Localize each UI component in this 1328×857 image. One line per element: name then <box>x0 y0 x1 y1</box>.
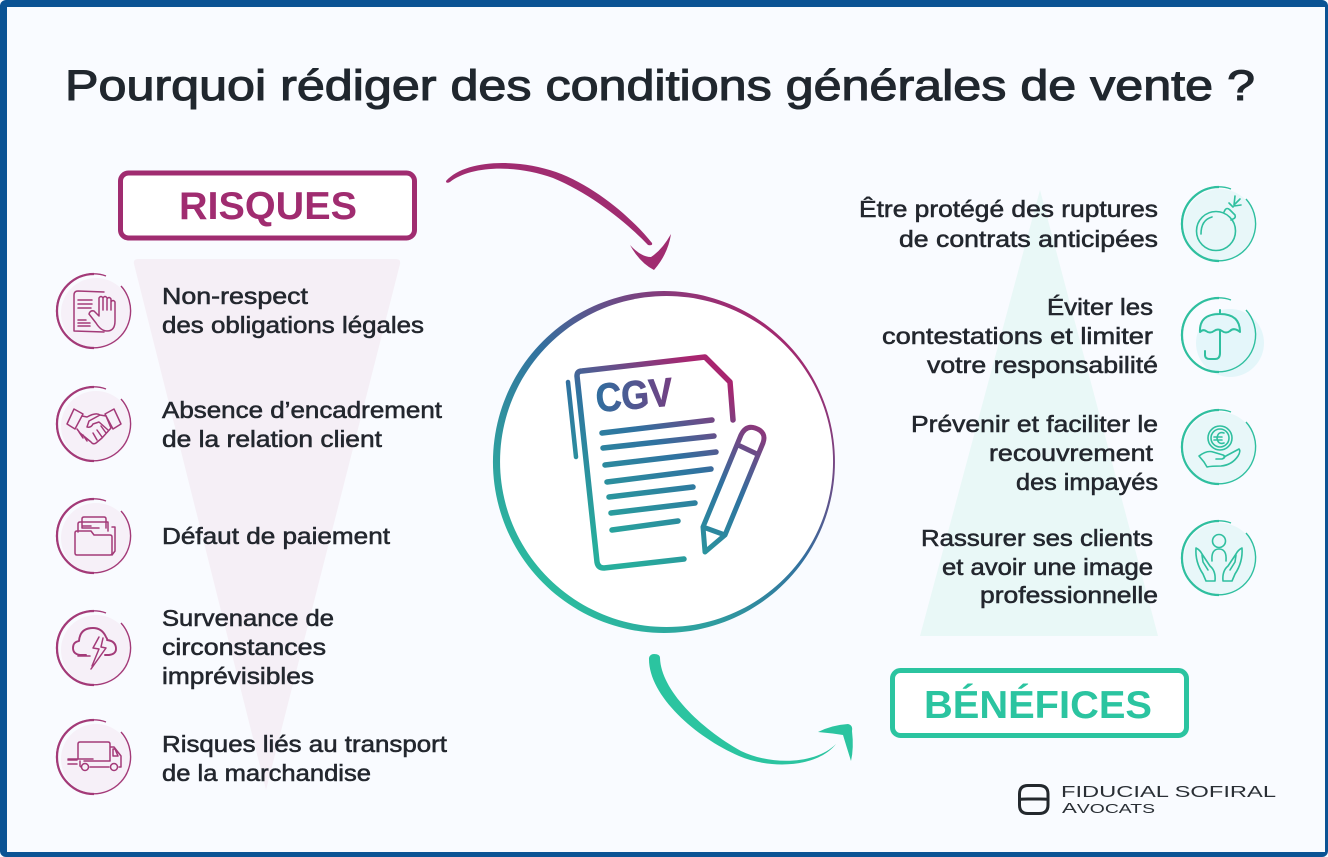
benefit 1 icon: bomb <box>1182 187 1256 261</box>
label: CGV: CGV <box>594 370 675 421</box>
panel: bénéfices <box>859 187 1264 735</box>
heading: bénéfices <box>892 670 1186 736</box>
benefit 2 text: Éviter les <box>1047 294 1153 320</box>
risk 5 text <box>162 731 448 786</box>
risk 2 text: de la relation client <box>162 426 383 452</box>
title: Pourquoi rédiger des conditions générales de vente ? <box>65 62 1255 110</box>
benefit 3 text: Prévenir et faciliter le <box>911 411 1158 437</box>
risk 1 text <box>162 283 424 338</box>
risk 3 text: Défaut de paiement <box>162 523 391 549</box>
logo: Fiducial Sofiral Avocats <box>1020 784 1276 817</box>
benefit 2 text: votre responsabilité <box>927 352 1158 378</box>
benefit 4 icon: person in hands <box>1182 521 1256 595</box>
benefit 2 text: contestations et limiter <box>882 323 1153 349</box>
benefit 1 text: Être protégé des ruptures <box>859 196 1158 222</box>
benefit 4 text <box>921 525 1158 608</box>
risk 1 icon: document and stop hand <box>57 274 131 348</box>
risk 2 icon: handshake <box>57 387 131 461</box>
heading: risques <box>120 173 414 238</box>
icon: CGV document and pencil <box>568 357 764 568</box>
benefit 2 icon: umbrella <box>1182 298 1264 377</box>
arrow: risks to contract <box>446 163 671 270</box>
risk 1 text: Non-respect <box>162 283 309 309</box>
benefit 1 text <box>859 196 1158 252</box>
benefit 2 text <box>882 294 1158 378</box>
panel: risques <box>57 173 448 794</box>
risk 2 text <box>162 397 443 452</box>
background funnel: risks <box>134 259 400 790</box>
risk 1 text: des obligations légales <box>162 312 424 338</box>
heading: bénéfices: BÉNÉFICES <box>924 683 1152 727</box>
risk 4 text <box>162 605 334 689</box>
benefit 4 text: Rassurer ses clients <box>921 525 1153 551</box>
risk 2 text: Absence d’encadrement <box>162 397 443 423</box>
benefit 3 text <box>911 411 1158 495</box>
central circle with contract <box>493 291 835 633</box>
risk 4 text: imprévisibles <box>162 663 314 689</box>
benefit 4 text: et avoir une image <box>942 554 1153 580</box>
risk 3 icon: folder <box>57 499 131 573</box>
risk 5 text: Risques liés au transport <box>162 731 448 757</box>
arrow: contract to benefits <box>649 654 853 764</box>
benefit 1 text: de contrats anticipées <box>899 226 1158 252</box>
risk 4 icon: storm cloud <box>57 611 131 685</box>
background funnel: benefits <box>920 190 1158 636</box>
benefit 3 icon: coin in hand <box>1182 410 1256 484</box>
benefit 3 text: recouvrement <box>989 440 1154 466</box>
risk 4 text: Survenance de <box>162 605 334 631</box>
benefit 3 text: des impayés <box>1016 469 1158 495</box>
logo: Fiducial Sofiral Avocats: A VOCATS <box>1062 800 1155 817</box>
risk 5 text: de la marchandise <box>162 760 371 786</box>
benefit 4 text: professionnelle <box>980 582 1158 608</box>
risk 5 icon: delivery truck <box>57 720 131 794</box>
logo: Fiducial Sofiral Avocats: FIDUCIAL SOFIRAL <box>1061 784 1276 801</box>
risk 4 text: circonstances <box>162 634 326 660</box>
heading: risques: RISQUES <box>179 185 357 228</box>
